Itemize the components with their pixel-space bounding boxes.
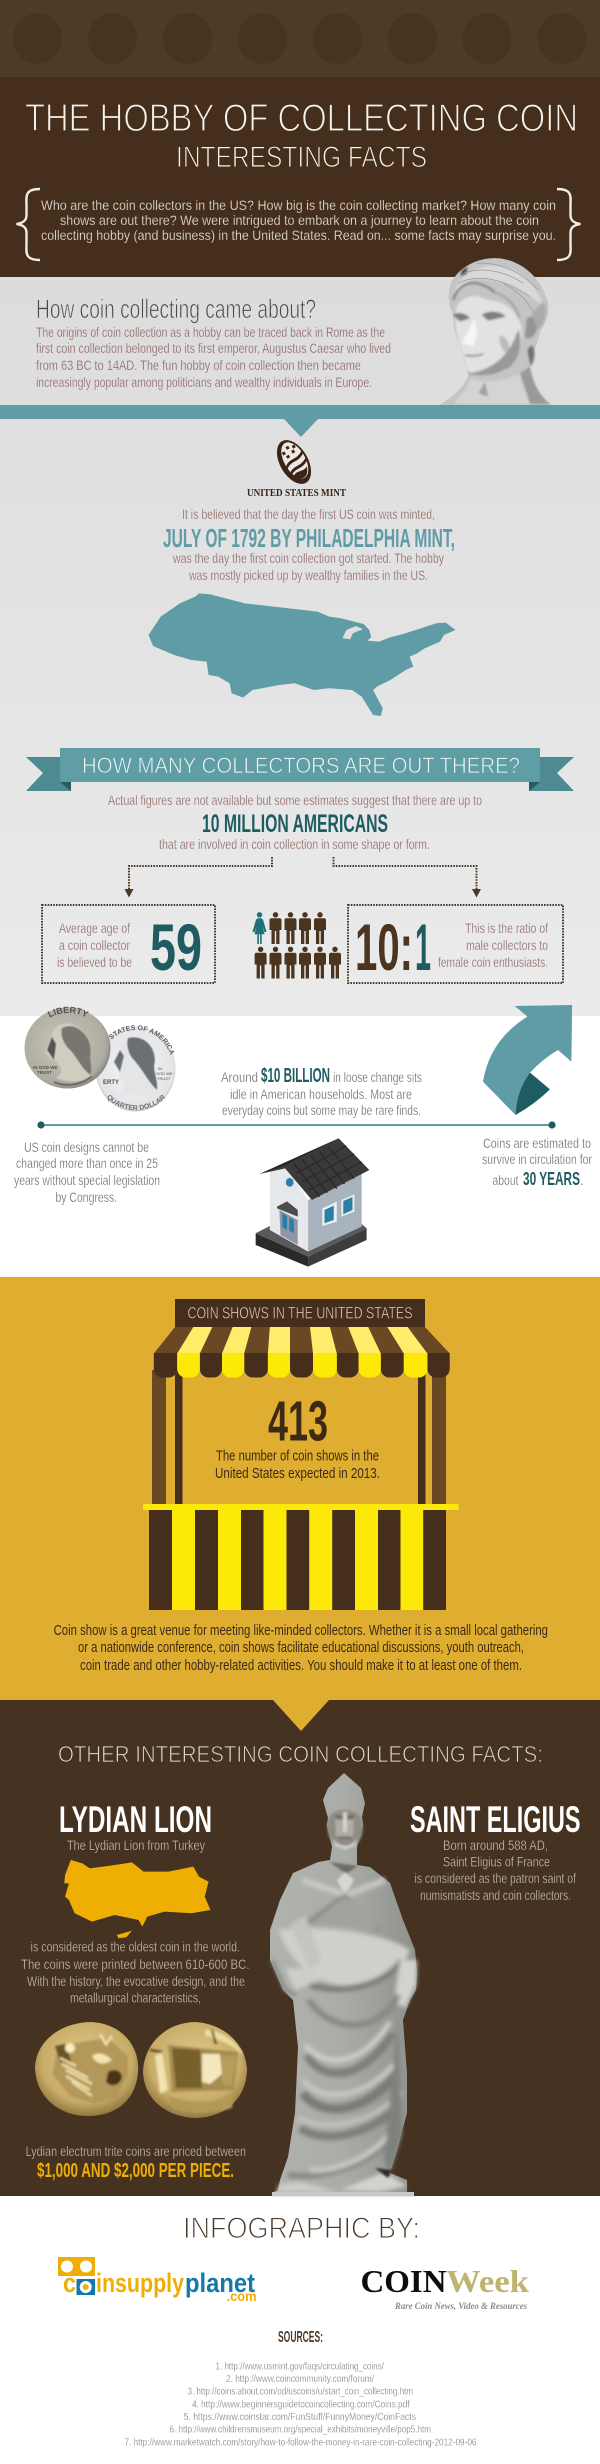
text block: first coin collection belonged to its first emperor, Augustus Caesar who lived — [36, 340, 391, 356]
text block: first US coin: was mostly picked up by wealthy families in the US. — [188, 567, 428, 583]
timeline line — [37, 1121, 556, 1129]
sources list: 1. http://www.usmint.gov/faqs/circulating_coins/ — [216, 2360, 384, 2372]
logo: CoinWeek: COIN — [360, 2263, 446, 2299]
panel: credits — [0, 2192, 600, 2464]
sources heading: SOURCES: — [278, 2329, 323, 2346]
heading: OTHER INTERESTING COIN COLLECTING FACTS: — [58, 1741, 543, 1767]
text block: With the history, the evocative design, and the — [27, 1973, 245, 1989]
ribbon heading: HOW MANY COLLECTORS ARE OUT THERE? — [82, 753, 520, 778]
icon: coins — [24, 1006, 176, 1112]
counter — [143, 1504, 458, 1610]
sources list: 4. http://www.beginnersguidetocoincollecting.com/Coins.pdf — [192, 2398, 410, 2410]
intro text with braces: shows are out there? We were intrigued to embark on a journey to learn about the coin — [60, 212, 539, 228]
text block: ten million — [108, 792, 482, 852]
subheading: LYDIAN LION — [59, 1799, 212, 1840]
text block: loose change: $10 BILLION — [261, 1065, 330, 1087]
top band of coins — [0, 0, 600, 77]
arrow: right — [334, 857, 481, 898]
panel: header — [0, 0, 600, 277]
arrow: left — [124, 857, 272, 898]
text block: loose change: idle in American households. Most are — [230, 1086, 412, 1102]
panel: coin shows — [0, 1277, 600, 1700]
quarter coin — [96, 1025, 176, 1112]
quarter coin: IN — [158, 1066, 162, 1071]
map: United States — [148, 593, 455, 716]
callout: ratio: female coin enthusiasts. — [438, 954, 548, 970]
callout: ratio — [348, 905, 563, 984]
sources list: 2. http://www.coincommunity.com/forum/ — [226, 2373, 374, 2385]
panel: other facts — [0, 1700, 600, 2197]
sources list: 7. http://www.marketwatch.com/story/how-to-follow-the-money-in-rare-coin-collecting-2012-09-06 — [124, 2437, 477, 2449]
text block — [36, 324, 391, 390]
panel: how many collectors — [26, 748, 574, 984]
icon: people ratio — [252, 912, 341, 978]
text block: designs: years without special legislation — [14, 1172, 160, 1188]
panel: how coin collecting came about — [36, 258, 552, 405]
logo: coinsupplyplanet — [58, 2257, 256, 2304]
text block: circulation: about — [492, 1172, 519, 1188]
logo: CoinWeek: Rare Coin News, Video & Resources — [394, 2302, 527, 2312]
text block: designs: US coin designs cannot be — [24, 1139, 149, 1155]
icon: lion coin — [35, 2022, 138, 2116]
panel: US mint — [148, 434, 455, 716]
text block: price — [26, 2143, 246, 2182]
text block: loose change — [221, 1065, 422, 1118]
logo: CoinWeek: Week — [446, 2263, 529, 2299]
statue base — [272, 2192, 414, 2196]
sources list: 5. https://www.coinstar.com/FunStuff/FunnyMoney/CoinFacts — [184, 2411, 416, 2423]
heading: How coin collecting came about? — [36, 294, 316, 324]
teal band with pointer — [0, 405, 600, 437]
ribbon heading — [26, 748, 574, 791]
text block: metallurgical characteristics, — [70, 1990, 201, 2006]
text block: designs: changed more than once in 25 — [16, 1155, 158, 1171]
text block: loose change: Around — [221, 1069, 258, 1085]
heading: INFOGRAPHIC BY: — [183, 2212, 420, 2245]
text block: price: Lydian electrum trite coins are priced between — [26, 2143, 246, 2159]
stall sign — [175, 1299, 425, 1327]
washington coin: LIBERTY — [48, 1006, 89, 1018]
title: INTERESTING FACTS — [176, 141, 427, 174]
quarter coin: TRUST — [157, 1076, 171, 1081]
logo: coinsupplyplanet: .com — [226, 2288, 256, 2304]
quarter coin: QUARTER DOLLAR — [108, 1095, 166, 1110]
intro text with braces — [16, 189, 580, 260]
stat: 413 shows — [215, 1390, 380, 1482]
quarter coin: GOD WE — [156, 1071, 173, 1076]
logo: coinsupplyplanet: c — [63, 2268, 76, 2298]
text block: venue — [54, 1622, 548, 1674]
text block: The origins of coin collection as a hobby can be traced back in Rome as the — [36, 324, 385, 340]
text block: loose change: in loose change sits — [333, 1069, 422, 1085]
text block: ten million: that are involved in coin collection in some shape or form. — [159, 836, 430, 852]
logo: CoinWeek — [360, 2263, 529, 2312]
illustration: market stall — [143, 1299, 458, 1610]
callout: average age: 59 — [150, 910, 202, 984]
text block: Born around 588 AD, — [443, 1837, 548, 1853]
washington coin — [24, 1006, 110, 1088]
callout: ratio: 1 — [415, 910, 431, 984]
sources list: 3. http://coins.about.com/od/uscoins/u/start_coin_collecting.htm — [188, 2386, 413, 2398]
text block: first US coin — [163, 506, 455, 583]
quarter coin: ERTY — [103, 1080, 119, 1086]
text block: The coins were printed between 610-600 BC. — [21, 1956, 250, 1972]
text block: first US coin: It is believed that the day the first US coin was minted, — [182, 506, 435, 522]
panel: grey background — [0, 277, 600, 1016]
stall sign: COIN SHOWS IN THE UNITED STATES — [188, 1304, 412, 1322]
icon: house — [256, 1138, 369, 1267]
quarter coin: STATES OF AMERICA — [109, 1025, 174, 1055]
text block: is considered as the oldest coin in the world. — [31, 1939, 240, 1955]
text block: ten million: 10 MILLION AMERICANS — [202, 810, 388, 838]
text block: first US coin: was the day the first coin collection got started. The hobby — [172, 550, 444, 566]
washington coin: TRUST — [37, 1070, 52, 1075]
logo: coinsupplyplanet: planet — [185, 2268, 255, 2298]
text block: designs: by Congress. — [56, 1189, 117, 1205]
callout: average age — [42, 905, 215, 984]
callout: average age: Average age of — [59, 920, 130, 936]
title — [25, 97, 578, 174]
text block — [21, 1939, 250, 2006]
text block: circulation: . — [580, 1172, 584, 1188]
callout: ratio: This is the ratio of — [465, 920, 548, 936]
text block: designs — [14, 1139, 160, 1205]
map: Turkey — [64, 1860, 210, 1938]
washington coin: IN GOD WE — [33, 1065, 58, 1070]
text block: loose change: everyday coins but some may be rare finds. — [222, 1102, 421, 1118]
callout: average age: a coin collector — [59, 937, 130, 953]
bust of Augustus — [439, 258, 552, 405]
text block: increasingly popular among politicians and wealthy individuals in Europe. — [36, 374, 372, 390]
icon: punch coin — [143, 2022, 247, 2118]
icon: mint logo: UNITED STATES MINT — [247, 488, 346, 499]
icon: curved arrow — [483, 1005, 572, 1115]
panel: white timeline section — [14, 1005, 592, 1267]
intro text with braces: Who are the coin collectors in the US? How big is the coin collecting market? How many coin — [41, 197, 556, 213]
pointer — [273, 1700, 329, 1731]
text block: circulation — [482, 1135, 592, 1189]
caption: The Lydian Lion from Turkey — [67, 1837, 205, 1853]
column: Lydian Lion — [21, 1799, 250, 2182]
column: Saint Eligius — [410, 1799, 580, 1903]
awning — [154, 1327, 450, 1378]
text block: Saint Eligius of France — [443, 1854, 550, 1870]
statue: Saint Eligius — [270, 1773, 417, 2197]
text block: price: $1,000 AND $2,000 PER PIECE. — [37, 2160, 234, 2182]
callout: ratio: male collectors to — [466, 937, 548, 953]
stat: 413 shows: The number of coin shows in the — [216, 1448, 379, 1464]
logo: coinsupplyplanet: insupply — [96, 2268, 184, 2298]
callout: ratio: 10: — [355, 910, 413, 984]
icon: mint logo — [247, 434, 346, 499]
text block: from 63 BC to 14AD. The fun hobby of coin collection then became — [36, 357, 361, 373]
callout: average age: is believed to be — [57, 954, 132, 970]
sources list: 6. http://www.childrensmuseum.org/special_exhibits/moneyville/pop5.htm — [170, 2424, 431, 2436]
sources list — [124, 2360, 477, 2449]
text block: ten million: Actual figures are not available but some estimates suggest that there are up to — [108, 792, 482, 808]
text block — [414, 1837, 576, 1903]
stat: 413 shows: United States expected in 2013. — [215, 1465, 380, 1482]
stat: 413 shows: 413 — [268, 1390, 328, 1454]
